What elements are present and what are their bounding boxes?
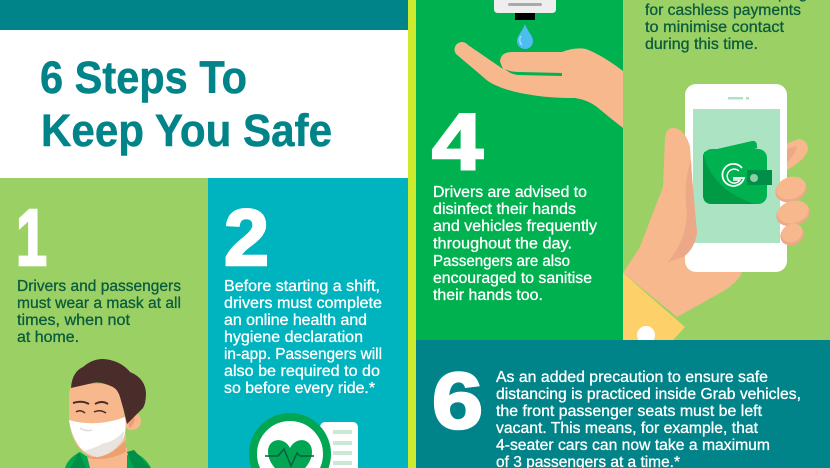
step 1 text bbox=[17, 278, 181, 346]
panel: step 1 bbox=[0, 178, 208, 468]
step 2 text: Before starting a shift, bbox=[224, 278, 380, 295]
top teal band bbox=[0, 0, 408, 30]
step 5 text: during this time. bbox=[645, 36, 758, 53]
icon: hand sanitiser dispenser bbox=[494, 0, 556, 49]
step 6 number: 6 bbox=[432, 356, 483, 445]
step 5 text bbox=[645, 0, 807, 53]
lime divider bbox=[408, 0, 416, 468]
step 4 text: and vehicles frequently bbox=[433, 218, 597, 235]
step 2 text: an online health and bbox=[224, 312, 367, 329]
step 1 text: times, when not bbox=[17, 312, 131, 329]
step 5 text: to minimise contact bbox=[645, 19, 785, 36]
step 2 text: so before every ride.* bbox=[224, 380, 375, 397]
step 4 number: 4 bbox=[432, 97, 484, 186]
step 1 text: at home. bbox=[17, 329, 79, 346]
step 6 text bbox=[496, 369, 801, 468]
step 4 text: encouraged to sanitise bbox=[433, 270, 592, 287]
step 1 text: Drivers and passengers bbox=[17, 278, 181, 295]
icon: health declaration bbox=[253, 417, 358, 468]
title panel bbox=[0, 30, 408, 178]
panel: step 4 bbox=[416, 0, 623, 340]
title bbox=[40, 52, 332, 156]
step 4 text: throughout the day. bbox=[433, 236, 572, 252]
step 2 text: also be required to do bbox=[224, 363, 380, 380]
step 6 text: distancing is practiced inside Grab vehicles, bbox=[496, 386, 801, 403]
step 2 text: in-app. Passengers will bbox=[224, 346, 382, 363]
step 2 text bbox=[224, 278, 382, 397]
title: 6 Steps To bbox=[40, 52, 247, 103]
step 2 text: drivers must complete bbox=[224, 295, 382, 312]
icon: open hand bbox=[455, 42, 623, 128]
step 1 text: must wear a mask at all bbox=[17, 295, 181, 312]
panel: step 6 bbox=[416, 340, 830, 468]
step 6 text: 4-seater cars can now take a maximum bbox=[496, 437, 770, 454]
step 4 text: disinfect their hands bbox=[433, 201, 576, 218]
step 6 text: the front passenger seats must be left bbox=[496, 403, 763, 420]
step 4 text: their hands too. bbox=[433, 287, 543, 304]
title: Keep You Safe bbox=[41, 105, 332, 156]
step 6 text: vacant. This means, for example, that bbox=[496, 420, 759, 437]
icon: hand holding phone with wallet bbox=[623, 84, 813, 344]
step 1 number: 1 bbox=[16, 193, 47, 282]
step 4 text: Drivers are advised to bbox=[433, 184, 587, 201]
step 2 text: hygiene declaration bbox=[224, 329, 363, 346]
panel: step 2 bbox=[208, 178, 408, 468]
step 2 number: 2 bbox=[224, 193, 269, 282]
step 6 text: As an added precaution to ensure safe bbox=[496, 369, 768, 386]
panel: step 5 bbox=[623, 0, 830, 344]
step 4 text: Passengers are also bbox=[433, 253, 570, 270]
step 4 text bbox=[433, 184, 597, 304]
step 5 text: for cashless payments bbox=[645, 2, 801, 19]
icon: man wearing mask bbox=[65, 359, 151, 468]
icon: green wallet bbox=[703, 141, 772, 204]
